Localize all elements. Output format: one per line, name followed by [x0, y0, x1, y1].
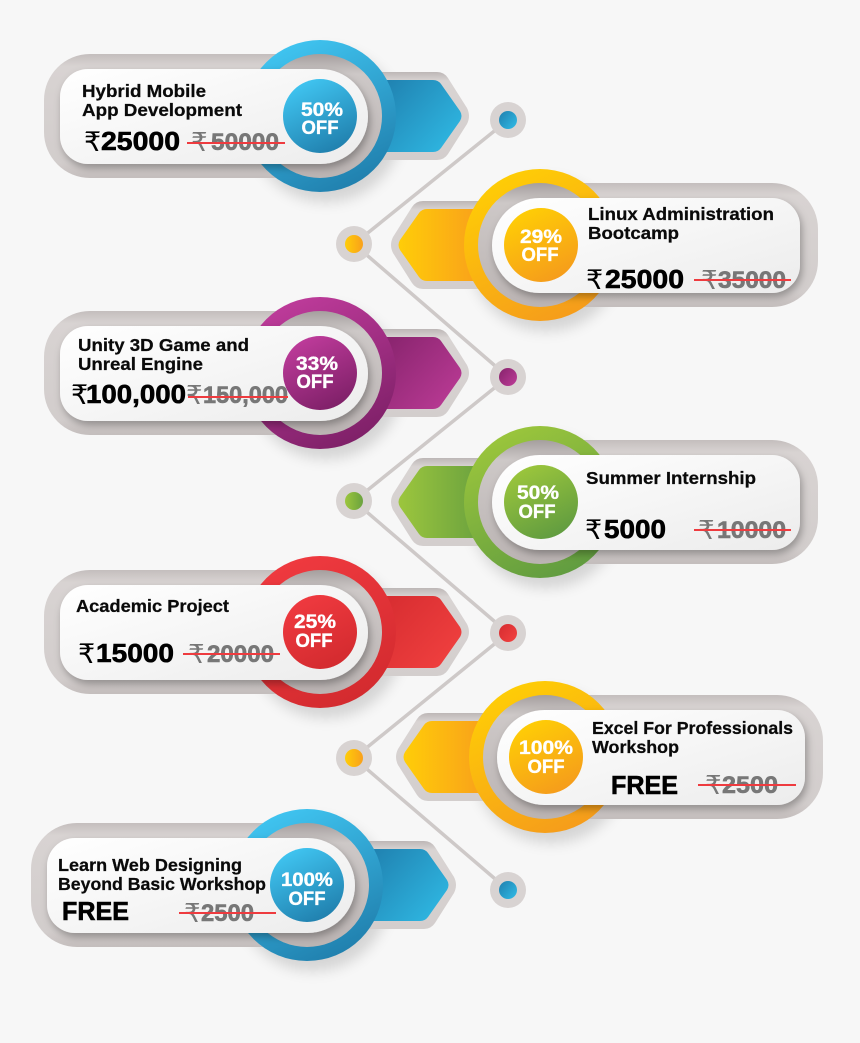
price: ₹: [78, 639, 95, 669]
old price: [694, 515, 791, 545]
node: red: [490, 615, 526, 651]
price: FREE: [611, 772, 678, 800]
title: Linux Administration: [588, 204, 774, 224]
timeline nodes: [336, 102, 526, 908]
discount badge: 33%: [296, 354, 338, 375]
old price: [179, 898, 276, 928]
price: [84, 127, 180, 157]
price: 25000: [605, 266, 684, 294]
panel: Hybrid Mobile App Development: [44, 40, 469, 202]
price: [585, 515, 666, 545]
panel: Unity 3D Game and Unreal Engine: [44, 297, 469, 459]
discount badge: [519, 738, 573, 778]
discount badge: [301, 100, 343, 139]
old price: 2500: [201, 900, 254, 927]
price: ₹: [586, 265, 603, 295]
title: [592, 718, 793, 757]
old price: 10000: [717, 517, 786, 544]
old price: ₹: [184, 898, 201, 928]
old price: [187, 127, 285, 157]
price: [78, 639, 174, 669]
title: Beyond Basic Workshop: [58, 874, 266, 894]
title: Learn Web Designing: [58, 855, 242, 875]
old price: [183, 639, 280, 669]
title: Hybrid Mobile: [82, 81, 206, 101]
title: Summer Internship: [586, 468, 756, 488]
discount badge: 50%: [517, 483, 559, 504]
old price: [698, 770, 796, 800]
title: Academic Project: [76, 596, 229, 616]
price: ₹: [84, 127, 101, 157]
panel: Excel For Professionals Workshop: [396, 681, 823, 843]
node: blue bottom: [490, 872, 526, 908]
old price: ₹: [701, 265, 718, 295]
price: ₹: [585, 515, 602, 545]
panel: Learn Web Designing Beyond Basic Workshop: [31, 809, 456, 971]
node: yellow: [336, 226, 372, 262]
discount badge: 100%: [519, 738, 573, 759]
discount badge: [520, 227, 562, 266]
old price: ₹: [698, 515, 715, 545]
node: blue top: [490, 102, 526, 138]
discount badge: OFF: [522, 245, 558, 266]
old price: 150,000: [203, 382, 288, 409]
discount badge: OFF: [296, 631, 332, 652]
price: [586, 265, 684, 295]
price: FREE: [62, 898, 129, 926]
discount badge: OFF: [296, 372, 334, 393]
discount badge: OFF: [518, 502, 556, 523]
title: Unreal Engine: [78, 354, 203, 374]
title: App Development: [82, 100, 242, 120]
title: Workshop: [592, 737, 679, 757]
price: 100,000: [86, 381, 186, 409]
discount badge: OFF: [528, 757, 564, 778]
discount badge: 100%: [281, 870, 333, 891]
title: [58, 855, 266, 894]
old price: 35000: [718, 267, 786, 294]
old price: [694, 265, 791, 295]
price: 5000: [604, 516, 666, 544]
connector lines: [354, 120, 508, 890]
title: [82, 81, 242, 120]
old price: ₹: [188, 639, 205, 669]
old price: 2500: [722, 772, 778, 799]
title: Unity 3D Game and: [78, 335, 249, 355]
node: green: [336, 483, 372, 519]
node: purple: [490, 359, 526, 395]
panel: Linux Administration Bootcamp: [391, 169, 818, 331]
old price: ₹: [186, 380, 203, 410]
discount badge: 25%: [294, 612, 336, 633]
title: Bootcamp: [588, 223, 679, 243]
discount badge: [281, 870, 333, 910]
discount badge: [296, 354, 338, 393]
old price: ₹: [191, 127, 208, 157]
discount badge: 29%: [520, 227, 562, 248]
price: ₹: [71, 380, 88, 410]
title: [588, 204, 774, 243]
old price: 50000: [211, 129, 279, 156]
panel: Summer Internship: [391, 426, 818, 588]
discount badge: OFF: [302, 118, 338, 139]
price: 25000: [101, 128, 180, 156]
old price: 20000: [207, 641, 274, 668]
title: Excel For Professionals: [592, 718, 793, 738]
discount badge: [517, 483, 559, 523]
panel: Academic Project: [44, 556, 469, 718]
discount badge: [294, 612, 336, 652]
title: [78, 335, 249, 374]
old price: ₹: [705, 770, 722, 800]
price: 15000: [96, 640, 174, 668]
discount badge: OFF: [288, 889, 326, 910]
node: yellow lower: [336, 740, 372, 776]
discount badge: 50%: [301, 100, 343, 121]
